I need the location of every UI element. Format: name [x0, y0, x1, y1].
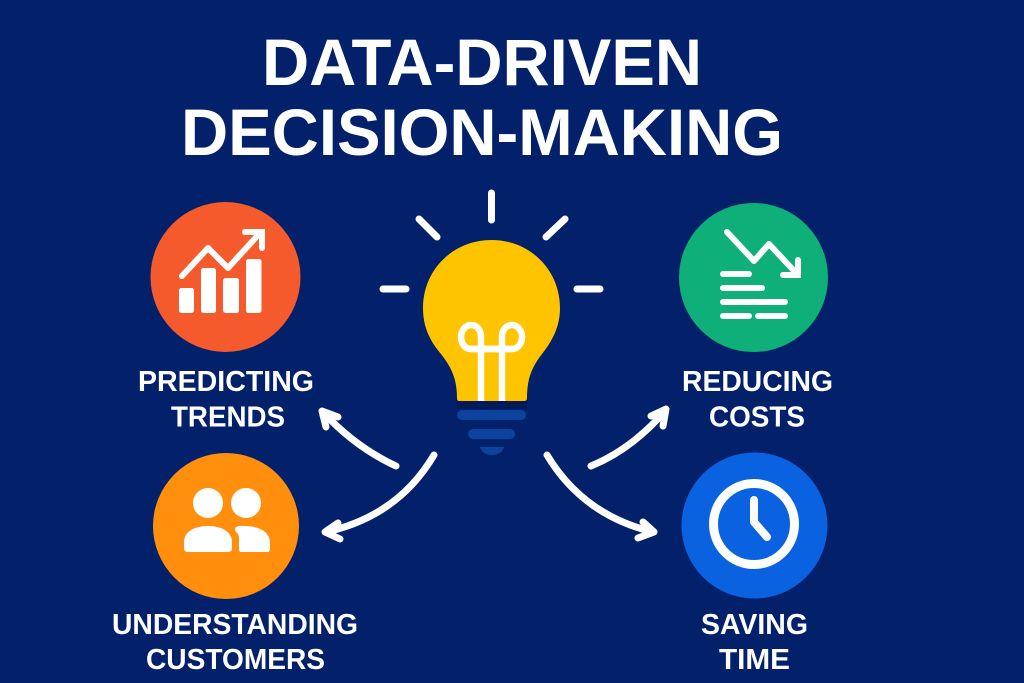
- arrow: to predicting trends: [322, 411, 396, 466]
- bulb rays: [383, 193, 600, 289]
- title: [181, 25, 783, 169]
- icon: falling chart and lines: [679, 203, 828, 352]
- title: DATA-DRIVEN: [262, 25, 702, 99]
- panel: understanding customers: [112, 453, 358, 676]
- label: reducing costs: COSTS: [709, 402, 805, 434]
- arrow: to saving time: [547, 455, 654, 538]
- label: understanding customers: CUSTOMERS: [146, 644, 325, 676]
- panel: reducing costs: [679, 203, 833, 434]
- label: predicting trends: PREDICTING: [138, 366, 314, 398]
- title: DECISION-MAKING: [181, 95, 783, 169]
- label: predicting trends: TRENDS: [171, 402, 285, 434]
- icon: clock: [682, 452, 828, 598]
- icon: light bulb with rays: [383, 193, 600, 455]
- icon: rising chart: [150, 202, 300, 352]
- label: reducing costs: REDUCING: [682, 366, 833, 398]
- label: reducing costs: [682, 366, 833, 434]
- icon: two people: [153, 453, 299, 599]
- bulb filament: [461, 325, 522, 401]
- label: understanding customers: UNDERSTANDING: [112, 609, 358, 641]
- label: saving time: [701, 609, 808, 676]
- arrow: to reducing costs: [591, 409, 666, 466]
- label: understanding customers: [112, 609, 358, 676]
- panel: predicting trends: [138, 202, 314, 434]
- label: saving time: TIME: [719, 644, 790, 676]
- label: saving time: SAVING: [701, 609, 808, 641]
- panel: saving time: [682, 452, 828, 676]
- bulb base: [457, 401, 527, 455]
- label: predicting trends: [138, 366, 314, 434]
- arrow: to understanding customers: [325, 455, 434, 539]
- bulb glass: [423, 240, 560, 401]
